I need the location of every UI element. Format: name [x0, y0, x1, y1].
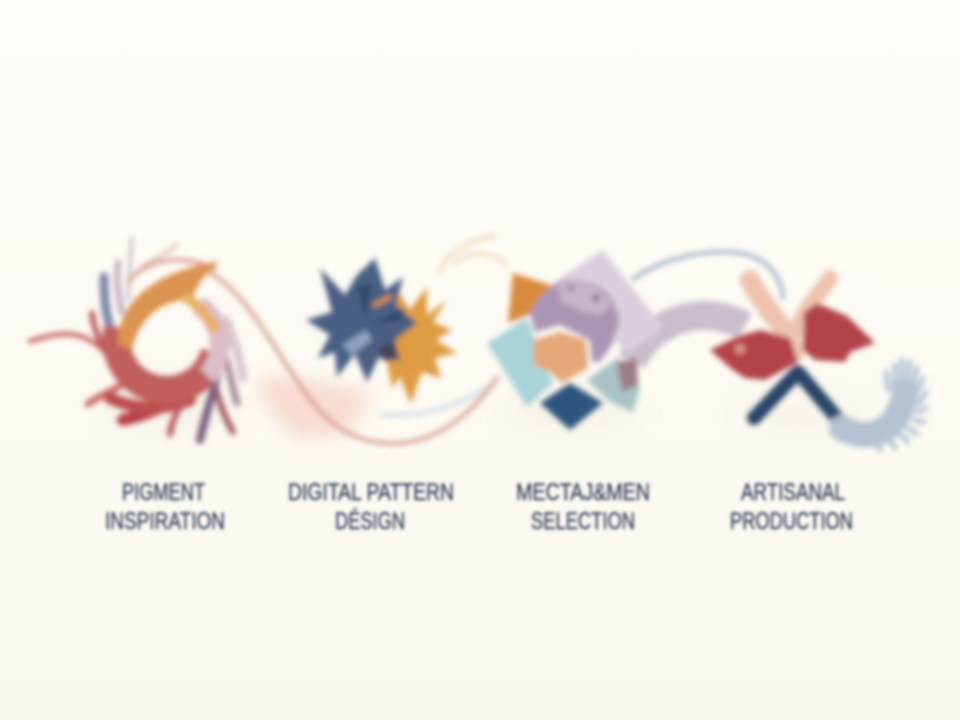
label: artisanal production	[730, 479, 853, 535]
stage 4: artisanal production butterfly	[710, 278, 926, 450]
label: digital pattern design: DÉSIGN	[335, 508, 405, 535]
label: digital pattern design: DIGITAL PATTERN	[288, 479, 454, 506]
stage labels	[105, 479, 853, 535]
red lower arc of ring	[117, 328, 215, 390]
label: pigment inspiration: PIGMENT	[122, 479, 205, 506]
connector ribbons between stages	[205, 236, 783, 444]
pale blue line	[382, 382, 495, 415]
stage 1: pigment inspiration feather ring	[30, 238, 243, 440]
label: material selection: SELECTION	[531, 508, 635, 535]
dark eye spots	[568, 285, 574, 291]
stage 2: digital pattern starburst	[306, 258, 457, 404]
rose wave line	[205, 270, 497, 444]
orange crescent top of ring	[118, 261, 220, 350]
lavender rainbow band	[632, 316, 745, 362]
label: artisanal production: PRODUCTION	[730, 508, 853, 535]
stage 3: material selection paper collage	[487, 250, 663, 430]
outer feathers	[30, 238, 243, 440]
label: digital pattern design	[288, 479, 454, 535]
peach ears	[750, 278, 830, 352]
orange star	[385, 287, 457, 404]
soft shadows	[100, 375, 870, 435]
navy diamond	[540, 383, 603, 430]
mauve right arc of ring	[198, 305, 220, 376]
golden highlight	[186, 298, 214, 328]
cream wisp	[440, 236, 506, 272]
red right wing	[803, 303, 875, 362]
label: material selection	[516, 479, 650, 535]
blue arc line	[633, 252, 783, 298]
label: pigment inspiration	[105, 479, 225, 535]
red left wing	[710, 330, 798, 380]
blue feather tail	[842, 360, 926, 450]
label: material selection: MECTAJ&MEN	[516, 479, 650, 506]
label: pigment inspiration: INSPIRATION	[105, 508, 225, 535]
navy star	[306, 258, 417, 382]
navy chevron	[754, 372, 837, 418]
lavender diamond	[557, 250, 663, 353]
purple textured blob	[530, 280, 620, 362]
pink smudge behind curve	[258, 377, 372, 440]
pale blue centre petals	[342, 330, 372, 355]
peach patch	[534, 332, 588, 383]
pale aqua shard	[487, 318, 553, 407]
label: artisanal production: ARTISANAL	[741, 479, 845, 506]
grey-teal shard	[587, 358, 640, 412]
darker spokes	[358, 285, 405, 325]
dark core	[379, 343, 397, 361]
orange triangle	[508, 273, 557, 323]
orange fleck	[375, 297, 390, 305]
lighter purple top	[558, 282, 612, 315]
pale star speck	[735, 344, 745, 354]
mauve fragment	[617, 358, 638, 392]
